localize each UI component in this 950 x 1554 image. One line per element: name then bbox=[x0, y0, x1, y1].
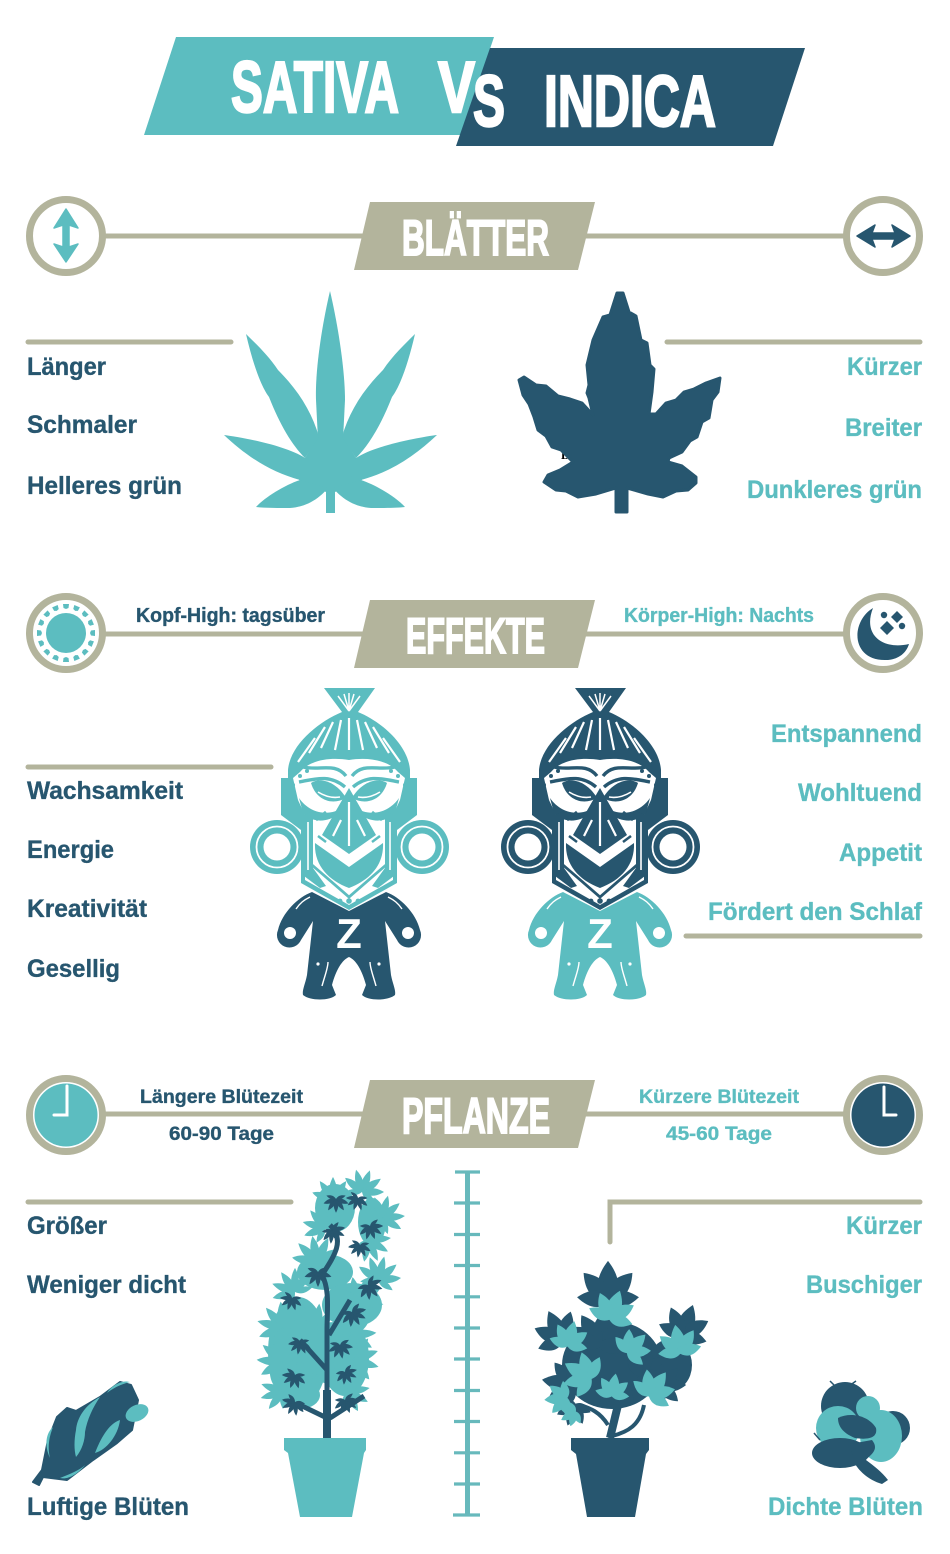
icon: indica leaf bbox=[519, 293, 720, 512]
icon: sativa plant bbox=[247, 1163, 414, 1440]
icon: moon bbox=[846, 596, 920, 670]
list: sativa plant traits: Größer bbox=[27, 1212, 107, 1240]
badge: effekte bbox=[354, 600, 595, 668]
indica title: INDICA bbox=[544, 62, 716, 142]
list: sativa plant traits: Weniger dicht bbox=[27, 1271, 187, 1299]
list: sativa effects: Kreativität bbox=[27, 895, 148, 923]
list: sativa plant traits: Luftige Blüten bbox=[27, 1493, 189, 1521]
badge: blätter bbox=[354, 202, 595, 270]
label: körper-high: Körper-High: Nachts bbox=[624, 605, 814, 627]
list: indica plant traits: Buschiger bbox=[806, 1271, 922, 1299]
figure: indica mask bbox=[501, 688, 700, 1000]
list: sativa leaf traits: Helleres grün bbox=[27, 472, 182, 500]
list: sativa effects: Gesellig bbox=[27, 955, 120, 983]
lines: plant callouts bbox=[28, 1202, 920, 1242]
list: sativa leaf traits bbox=[27, 353, 182, 500]
list: indica leaf traits bbox=[747, 353, 922, 504]
indica banner bbox=[456, 48, 805, 146]
list: sativa effects bbox=[27, 777, 184, 983]
section: blätter header bbox=[30, 200, 920, 272]
list: sativa effects: Energie bbox=[27, 836, 114, 864]
label: indica flowering time bbox=[639, 1087, 800, 1145]
list: indica leaf traits: Kürzer bbox=[847, 353, 922, 381]
heading: effekte: EFFEKTE bbox=[406, 608, 545, 664]
list: indica effects: Wohltuend bbox=[798, 779, 922, 807]
icon: horizontal arrow bbox=[846, 200, 920, 272]
list: indica leaf traits: Dunkleres grün bbox=[747, 476, 922, 504]
figure: sativa mask: Z bbox=[336, 910, 362, 957]
list: indica plant traits: Kürzer bbox=[846, 1212, 922, 1240]
leaf lines left and right bbox=[28, 340, 920, 344]
label: sativa flowering time: Längere Blütezeit bbox=[140, 1087, 304, 1108]
list: sativa plant traits bbox=[27, 1212, 189, 1521]
icon: indica plant bbox=[525, 1261, 717, 1438]
list: indica effects: Fördert den Schlaf bbox=[708, 898, 923, 926]
sativa banner bbox=[144, 37, 494, 135]
sativa title: SATIVA bbox=[231, 48, 399, 128]
list: indica leaf traits: Breiter bbox=[845, 414, 922, 442]
list: sativa leaf traits: Schmaler bbox=[27, 411, 137, 439]
heading: pflanze: PFLANZE bbox=[402, 1088, 550, 1144]
label: indica flowering time: 45-60 Tage bbox=[666, 1124, 772, 1145]
icon: airy bud bbox=[33, 1382, 151, 1485]
icon: indica clock bbox=[846, 1078, 920, 1152]
list: sativa effects: Wachsamkeit bbox=[27, 777, 184, 805]
label: sativa flowering time bbox=[140, 1087, 304, 1145]
list: sativa leaf traits: Länger bbox=[27, 353, 106, 381]
figure: indica mask: Z bbox=[587, 910, 613, 957]
list: indica effects: Entspannend bbox=[771, 720, 922, 748]
line: indica effects bbox=[686, 934, 920, 938]
stray text behind indica leaf: Dr bbox=[561, 448, 576, 462]
icon: indica pot bbox=[571, 1438, 649, 1517]
title banner bbox=[144, 37, 805, 146]
height ruler bbox=[453, 1172, 480, 1515]
list: indica plant traits: Dichte Blüten bbox=[768, 1493, 923, 1521]
list: indica effects bbox=[708, 720, 923, 926]
vs V: V bbox=[438, 48, 475, 128]
line: sativa effects bbox=[28, 764, 271, 770]
section: pflanze header bbox=[30, 1078, 920, 1152]
icon: sativa pot bbox=[284, 1438, 366, 1517]
list: indica effects: Appetit bbox=[839, 839, 923, 867]
icon: sun bbox=[30, 596, 102, 670]
label: indica flowering time: Kürzere Blütezeit bbox=[639, 1087, 800, 1108]
icon: sativa clock bbox=[30, 1078, 102, 1152]
badge: pflanze bbox=[354, 1080, 595, 1148]
label: sativa flowering time: 60-90 Tage bbox=[169, 1124, 274, 1145]
section: effekte header bbox=[30, 596, 920, 670]
figure: sativa mask bbox=[250, 688, 449, 1000]
label: kopf-high: Kopf-High: tagsüber bbox=[136, 605, 325, 627]
icon: sativa leaf bbox=[224, 291, 437, 513]
icon: dense bud bbox=[812, 1381, 910, 1484]
heading: blätter: BLÄTTER bbox=[402, 210, 549, 266]
icon: vertical arrow bbox=[30, 200, 102, 272]
list: indica plant traits bbox=[768, 1212, 923, 1521]
vs S: S bbox=[473, 62, 505, 142]
